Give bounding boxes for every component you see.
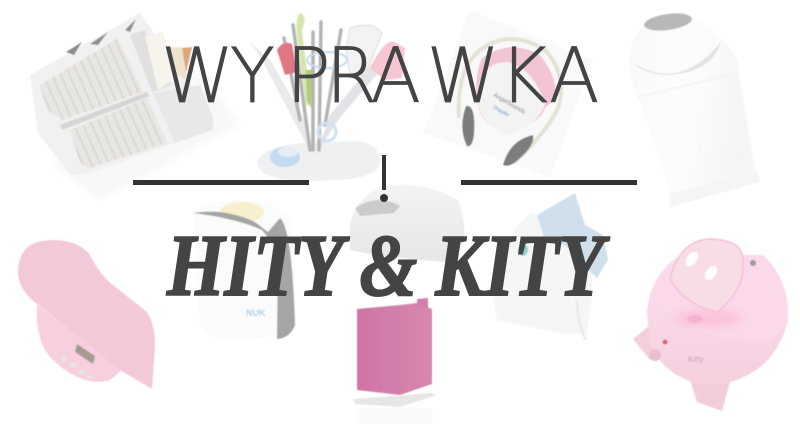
product: bottle drying rack — [250, 13, 405, 181]
product: fetal doppler with headphones — [423, 10, 593, 177]
divider: centre exclamation mark — [380, 155, 388, 202]
product: fetal doppler with headphones: Doppler — [492, 105, 510, 119]
product: fetal doppler with headphones: AngelSounds — [492, 93, 526, 116]
product: pink pig humidifier: Kitty — [688, 355, 704, 364]
product: pink humidifier — [353, 298, 437, 424]
product: pink baby scale — [18, 240, 155, 389]
product: electric breast pump — [350, 185, 464, 262]
product: NUK bottle warmer: NUK — [246, 308, 266, 318]
product: NUK bottle warmer — [193, 200, 295, 340]
product: pink pig humidifier — [633, 239, 788, 411]
divider: right bar — [461, 180, 637, 185]
product: nebulizer — [493, 193, 608, 340]
product: diaper pail — [629, 11, 760, 207]
product: diaper organizer — [30, 13, 240, 200]
divider: left bar — [133, 180, 309, 185]
title: WYPRAWKA: WYPRAWKA — [161, 32, 599, 120]
subtitle: HITY & KITY: HITY & KITY — [166, 218, 610, 315]
